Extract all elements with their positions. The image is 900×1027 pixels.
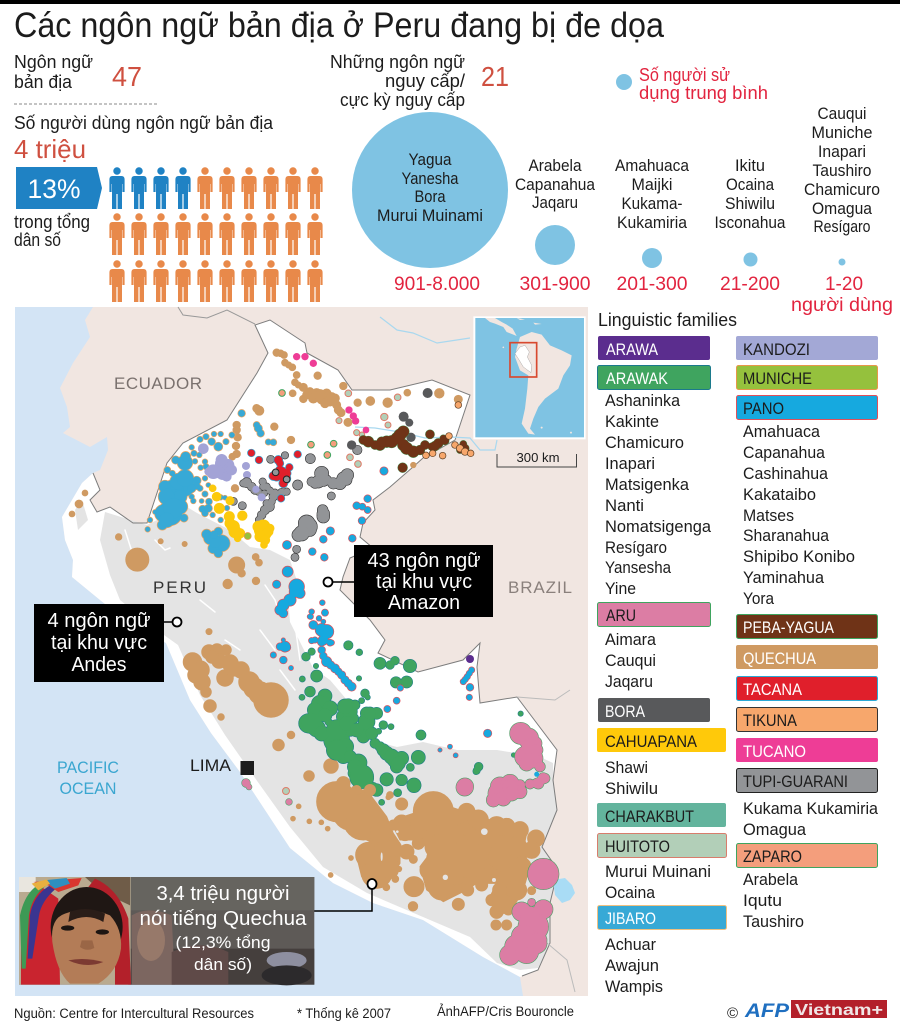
legend: Tikuna: [736, 708, 878, 732]
legend: Huitoto: Ocaina: [605, 883, 655, 902]
legend: Zaparo: Arabela: [743, 870, 798, 889]
bubble: 201-300: Kukamiria: [617, 214, 688, 232]
legend: Arawak: Inapari: [605, 454, 655, 473]
text: of total population: trong tổng: [14, 212, 90, 232]
bubble: 1-20: Inapari: [818, 143, 866, 161]
legend: Arawak: Ashaninka: [605, 391, 681, 410]
bubble: 21-200: [714, 157, 786, 295]
scale bar: [497, 450, 576, 467]
bubble: 201-300: Kukama-: [622, 195, 682, 213]
legend: Cahuapana: CAHUAPANA: [605, 732, 698, 751]
legend: Charakbut: CHARAKBUT: [605, 807, 694, 826]
bubble: 301-900: 301-900: [520, 274, 590, 295]
bubble: 301-900: [515, 157, 596, 295]
legend: Arawak: Kakinte: [605, 412, 659, 431]
legend: Arawak: Nanti: [605, 496, 644, 515]
dot: Muniche: [244, 532, 251, 540]
legend: Arawak: Yine: [605, 579, 636, 598]
footer: photo credit: ẢnhAFP/Cris Bouroncle: [437, 1004, 574, 1019]
photo callout: Quechua girl: [19, 877, 314, 985]
text: of total population: dân số: [14, 230, 61, 250]
legend: Quechua: QUECHUA: [743, 649, 817, 668]
legend: Tucano: [736, 738, 878, 762]
map label: Pacific Ocean: OCEAN: [60, 779, 116, 798]
legend: Pano: Kakataibo: [743, 485, 816, 504]
legend: Jibaro: Achuar: [605, 935, 656, 954]
legend: Muniche: MUNICHE: [743, 369, 812, 388]
scale bar: 300 km: [516, 450, 560, 465]
legend: Huitoto: [598, 834, 726, 902]
legend: Aru: Jaqaru: [605, 672, 653, 691]
bubble: 901-8000: Yagua: [408, 151, 452, 169]
legend: Bora: BORA: [605, 702, 646, 721]
callout: Quechua connector: [314, 879, 376, 911]
dots: Kandozi over Tupi: [252, 486, 266, 501]
legend: Arawak: [598, 366, 712, 598]
stat: indigenous languages: 47: [112, 61, 142, 92]
legend: Arawak: ARAWAK: [606, 369, 669, 388]
bubble: 1-20: 1-20: [825, 274, 863, 295]
dots: Tacana: [248, 450, 301, 502]
legend: Kandozi: KANDOZI: [743, 340, 810, 359]
legend: heading: Linguistic families: [598, 310, 737, 330]
dot: Pano over Aru: [534, 772, 539, 777]
text: of total population: [14, 212, 90, 250]
legend: Pano: Shipibo Konibo: [743, 547, 855, 566]
legend: Zaparo: [736, 844, 878, 931]
dots: Tupi-Guarani: [230, 446, 362, 561]
bubble: 1-20: [791, 105, 893, 316]
dots: Tikuna: [423, 402, 474, 459]
dot: Arawa: [466, 655, 474, 663]
legend: average speakers: [616, 65, 768, 103]
map: rivers and lake: [355, 317, 575, 903]
logo: AFP Vietnam+: [727, 1000, 887, 1022]
map label: Pacific Ocean: [57, 758, 119, 798]
map: Quechua east mass fill: [393, 793, 530, 913]
map: Quechua west lobe fill: [318, 790, 400, 887]
dots: Zaparo: [279, 390, 337, 458]
legend: Muniche: [736, 366, 878, 390]
callout: Amazon: tại khu vực: [376, 571, 472, 593]
legend: Quechua: [736, 645, 878, 669]
dot: Huitoto near the coast: [282, 788, 290, 794]
stat: indigenous languages: Ngôn ngữ: [14, 52, 93, 72]
footer: census note: * Thống kê 2007: [297, 1006, 391, 1021]
legend: Cahuapana: Shawi: [605, 758, 648, 777]
legend: Bora: [598, 698, 710, 722]
callout: Amazon: Amazon: [388, 592, 460, 614]
legend: Cahuapana: [597, 728, 726, 798]
legend: Aru: [598, 602, 710, 691]
stat: speakers: [14, 113, 274, 164]
bubble: 201-300: Maijki: [632, 176, 672, 194]
map label: Brazil: BRAZIL: [508, 578, 572, 597]
logo: AFP Vietnam+: AFP: [744, 1001, 789, 1022]
legend: Pano: Matses: [743, 506, 794, 525]
bubble: 201-300: [615, 157, 690, 295]
logo: AFP Vietnam+: Vietnam+: [795, 1002, 883, 1019]
legend: Tacana: [736, 676, 878, 700]
dots: Quechua: [69, 349, 544, 930]
bubble: 901-8000: Yanesha: [402, 170, 459, 188]
bubble: 1-20: Resígaro: [814, 218, 870, 236]
arrow: 13 percent: 13%: [28, 174, 80, 204]
map: ocean: [15, 307, 523, 996]
legend: Tupi-Guarani: Kukama Kukamiria: [743, 799, 879, 818]
legend: Jibaro: Awajun: [605, 956, 659, 975]
dots: Aru: [242, 723, 559, 965]
bubble: 1-20: Muniche: [812, 124, 872, 142]
photo callout: Quechua girl: (12,3% tổng: [176, 933, 270, 952]
callout: Andes: 4 ngôn ngữ: [48, 610, 150, 632]
legend: Zaparo: ZAPARO: [743, 847, 802, 866]
legend: average speakers: dụng trung bình: [639, 83, 768, 103]
legend: Pano: Yaminahua: [743, 568, 825, 587]
legend: Pano: PANO: [743, 399, 784, 418]
bubble: 1-20: Omagua: [812, 200, 873, 218]
map: highland patches near the coast: [75, 500, 88, 530]
map: Andes highlands: [100, 507, 558, 970]
dots: Bora: [347, 388, 433, 450]
inset map: South America: [473, 316, 586, 439]
dots: Kandozi: [198, 443, 251, 482]
bubble: 901-8000: [352, 112, 508, 295]
map: Peru territory: [62, 320, 558, 977]
stat: indigenous languages: [14, 52, 142, 92]
legend: Jibaro: JIBARO: [605, 909, 656, 928]
legend: Kandozi: [736, 336, 878, 360]
stat: endangered languages: cực kỳ nguy cấp: [340, 90, 465, 110]
legend: Charakbut: [597, 803, 726, 827]
bubble: 21-200: 21-200: [720, 274, 780, 295]
bubble: 901-8000: Murui Muinami: [377, 207, 483, 225]
top bar: [0, 0, 900, 4]
dots: Cahuapana: [209, 485, 274, 548]
bubble: 1-20: người dùng: [791, 295, 893, 316]
legend: Arawak: Resígaro: [605, 538, 667, 557]
bubble: 901-8000: 901-8.000: [394, 274, 480, 295]
arrow: 13 percent: [16, 167, 102, 209]
dots: Peba-Yagua: [359, 426, 469, 472]
footer: source: Nguồn: Centre for Intercultural Resources: [14, 1006, 254, 1021]
stat: indigenous languages: bản địa: [14, 72, 73, 92]
bubble: 301-900: Arabela: [528, 157, 582, 175]
dots: Huitoto: [336, 390, 401, 467]
legend: Zaparo: Iqutu: [743, 891, 782, 910]
callout: Amazon: 43 ngôn ngữ: [368, 550, 480, 572]
legend: Tucano: TUCANO: [743, 742, 806, 761]
bubble: 201-300: Amahuaca: [615, 157, 690, 175]
legend: Pano: Sharanahua: [743, 526, 830, 545]
callout: Andes: [34, 604, 182, 682]
legend: Arawak: Nomatsigenga: [605, 517, 712, 536]
map label: Lima: [190, 756, 254, 775]
legend: Pano: Yora: [743, 589, 774, 608]
callout: Andes: tại khu vực: [51, 632, 147, 654]
legend: Aru: ARU: [606, 606, 636, 625]
legend: Tupi-Guarani: [736, 768, 879, 839]
stat: speakers: 4 triệu: [14, 134, 86, 164]
dots: Quechua over Arawak: [317, 777, 376, 822]
dots: Pano: [271, 467, 491, 757]
legend: Arawak: Chamicuro: [605, 433, 684, 452]
bubble: 901-8000: Bora: [414, 188, 446, 206]
legend: Tupi-Guarani: Omagua: [743, 820, 807, 839]
legend: Peba-Yagua: PEBA-YAGUA: [743, 618, 835, 637]
legend: Aru: Aimara: [605, 630, 657, 649]
bubble: 1-20: Taushiro: [812, 162, 872, 180]
logo: AFP Vietnam+: ©: [727, 1005, 738, 1022]
legend: Tupi-Guarani: TUPI-GUARANI: [743, 772, 848, 791]
legend: Arawak: Matsigenka: [605, 475, 690, 494]
legend: Tikuna: TIKUNA: [743, 711, 798, 730]
legend: Cahuapana: Shiwilu: [605, 779, 658, 798]
legend: Tacana: TACANA: [743, 680, 803, 699]
bubble: 301-900: Capanahua: [515, 176, 596, 194]
map label: Peru: PERU: [153, 578, 206, 597]
legend: Huitoto: Murui Muinani: [605, 862, 711, 881]
legend: average speakers: Số người sử: [639, 65, 730, 85]
bubble: 21-200: Ocaina: [726, 176, 775, 194]
bubble: 201-300: 201-300: [616, 274, 688, 295]
map label: Lima: LIMA: [190, 756, 232, 775]
bubble: 301-900: Jaqaru: [532, 194, 578, 212]
photo callout: Quechua girl: nói tiếng Quechua: [140, 908, 307, 930]
legend: Arawak: Yansesha: [605, 558, 671, 577]
stat: endangered languages: nguy cấp/: [385, 71, 465, 91]
legend: Jibaro: [598, 906, 726, 996]
stat: endangered languages: 21: [481, 61, 509, 92]
legend: Arawa: ARAWA: [606, 340, 659, 359]
stat: endangered languages: Những ngôn ngữ: [330, 52, 465, 72]
legend: Pano: Capanahua: [743, 443, 826, 462]
dots: Jibaro: [145, 410, 276, 557]
map label: Pacific Ocean: PACIFIC: [57, 758, 119, 777]
bubble: 1-20: Chamicuro: [804, 181, 880, 199]
callout: Andes: Andes: [72, 654, 126, 676]
title: Các ngôn ngữ bản địa ở Peru đang bị đe dọa: [14, 6, 664, 45]
dots: Tupi over Tacana: [272, 469, 290, 483]
legend: Aru: Cauqui: [605, 651, 656, 670]
pictogram: people: [109, 167, 323, 302]
legend: Huitoto: HUITOTO: [605, 837, 670, 856]
bubble: 21-200: Isconahua: [714, 214, 786, 232]
panel: map: [15, 307, 588, 996]
photo callout: Quechua girl: dân số): [194, 955, 252, 974]
legend: Pano: Cashinahua: [743, 464, 828, 483]
photo callout: Quechua girl: 3,4 triệu người: [156, 883, 290, 905]
legend: Jibaro: Wampis: [605, 977, 663, 996]
map: neighbouring countries background: [15, 307, 588, 996]
map label: Ecuador: ECUADOR: [114, 374, 202, 393]
legend: Arawa: [598, 336, 710, 360]
legend: Pano: Amahuaca: [743, 422, 821, 441]
photo: image area: [19, 877, 314, 985]
map: borders: [90, 307, 575, 992]
stat: endangered languages: [330, 52, 509, 110]
callout: Amazon: [324, 545, 493, 617]
bubble: 1-20: Cauqui: [818, 105, 866, 123]
legend: Peba-Yagua: [736, 614, 878, 638]
bubble: 21-200: Ikitu: [735, 157, 765, 175]
bubble: 21-200: Shiwilu: [725, 195, 775, 213]
dots: Arawak: [299, 641, 523, 805]
legend: Pano: [736, 396, 878, 608]
dots: Tucano: [293, 353, 369, 433]
legend: Zaparo: Taushiro: [743, 912, 804, 931]
stat: speakers: Số người dùng ngôn ngữ bản địa: [14, 113, 274, 133]
map: small gaps in the Quechua mass: [381, 828, 496, 882]
